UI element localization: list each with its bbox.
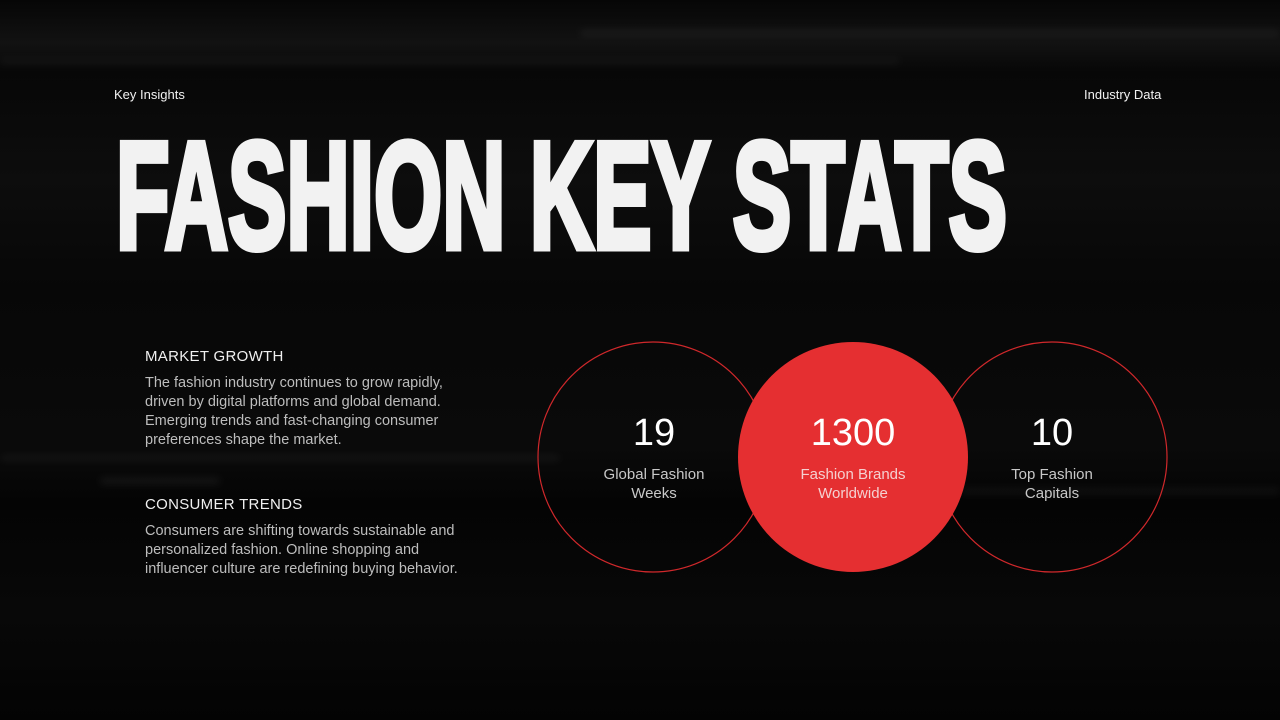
- stat: fashion brands worldwide: Worldwide: [818, 485, 888, 502]
- text block: market growth: The fashion industry continues to grow rapidly, driven by digital platforms and global demand. Emerging trends and fast-changing consumer preferences shape the market.: [145, 375, 443, 448]
- stat: fashion brands worldwide: [738, 342, 968, 572]
- stat: fashion brands worldwide: 1300: [811, 412, 895, 454]
- stat: global fashion weeks: Global Fashion: [604, 466, 704, 483]
- stat: top fashion capitals: 10: [1031, 412, 1073, 454]
- stat: fashion brands worldwide: Fashion Brands: [800, 466, 906, 483]
- stat: top fashion capitals: [937, 342, 1167, 572]
- stat: global fashion weeks: Weeks: [631, 485, 677, 502]
- label: key insights: Key Insights: [114, 87, 185, 102]
- stat: top fashion capitals: Top Fashion: [1011, 466, 1093, 483]
- text block: consumer trends: CONSUMER TRENDS: [145, 496, 303, 513]
- stat: top fashion capitals: Capitals: [1025, 485, 1079, 502]
- text block: market growth: MARKET GROWTH: [145, 348, 284, 365]
- text block: consumer trends: [145, 496, 458, 577]
- stat: global fashion weeks: 19: [633, 412, 675, 454]
- stat: global fashion weeks: [538, 342, 768, 572]
- label: industry data: Industry Data: [1084, 87, 1161, 102]
- text block: consumer trends: Consumers are shifting towards sustainable and personalized fashion. Online shopping and influencer culture are redefining buying behavior.: [145, 523, 458, 577]
